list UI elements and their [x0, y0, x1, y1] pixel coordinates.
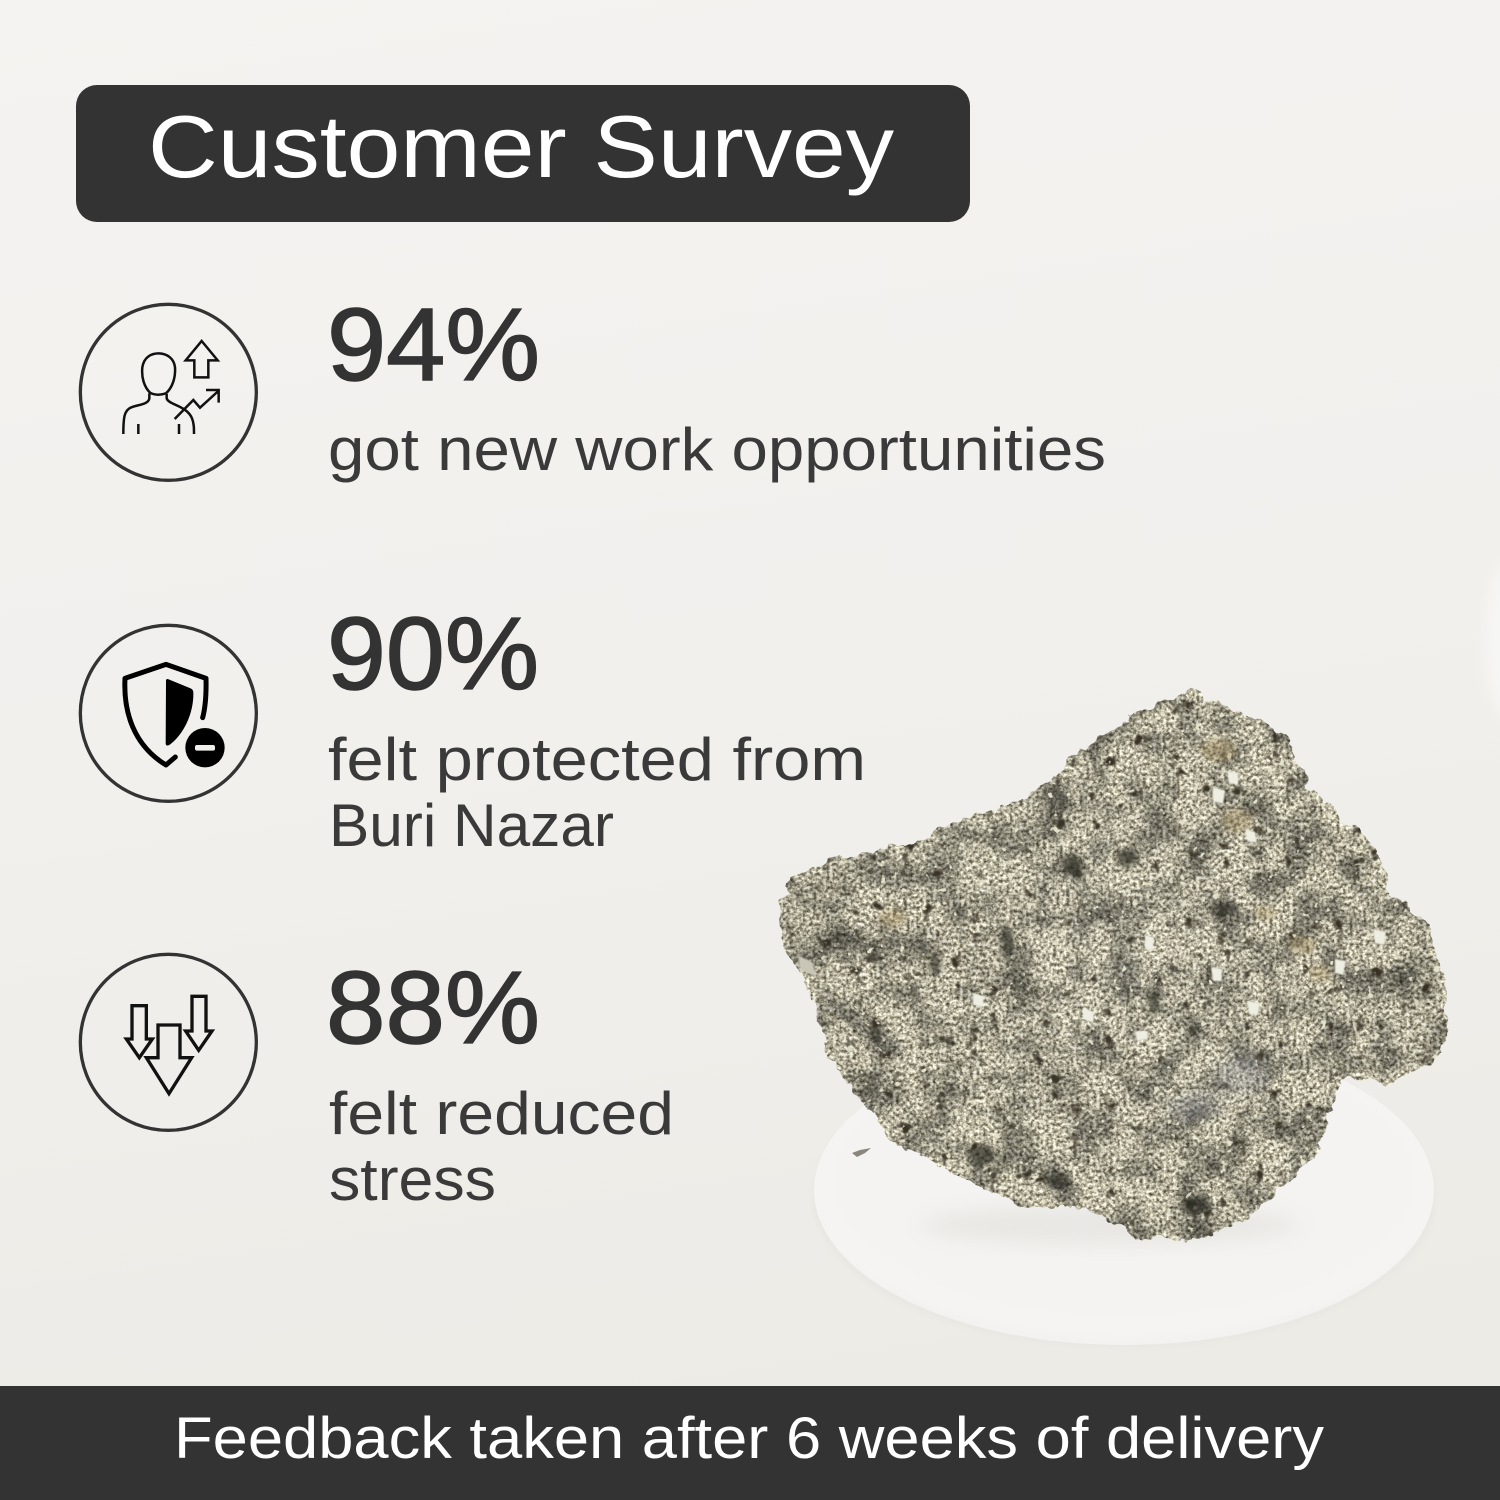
figure: 94%: 94% — [327, 287, 540, 402]
caption: felt protected from Buri Nazar — [328, 726, 866, 859]
heading: Customer Survey — [76, 85, 970, 222]
caption: felt reduced stress: felt reduced — [329, 1080, 674, 1147]
caption: felt protected from Buri Nazar: Buri Nazar — [329, 792, 614, 859]
stat row: 88% — [80, 950, 674, 1213]
figure: 88%: 88% — [326, 950, 540, 1065]
figure: 90%: 90% — [327, 596, 539, 711]
footer banner: Feedback taken after 6 weeks of delivery — [174, 1406, 1324, 1471]
background object at right edge — [1485, 555, 1500, 725]
pyrite rock — [778, 690, 1448, 1240]
caption: felt reduced stress: stress — [329, 1146, 496, 1213]
icon: shield with minus badge — [80, 625, 256, 801]
white marble plate — [812, 1035, 1436, 1348]
caption: felt protected from Buri Nazar: felt protected from — [328, 726, 866, 793]
footer banner — [0, 1386, 1500, 1500]
icon: three downward arrows — [80, 954, 256, 1130]
stat row: 94% — [80, 287, 1106, 483]
caption: felt reduced stress — [329, 1080, 674, 1213]
caption: got new work opportunities: got new work opportunities — [328, 416, 1106, 483]
photo: pyrite stone on white plate — [778, 690, 1448, 1348]
stat row: 90% — [80, 596, 866, 859]
icon: person with upward arrows — [80, 304, 256, 480]
heading: Customer Survey: Customer Survey — [148, 97, 894, 196]
